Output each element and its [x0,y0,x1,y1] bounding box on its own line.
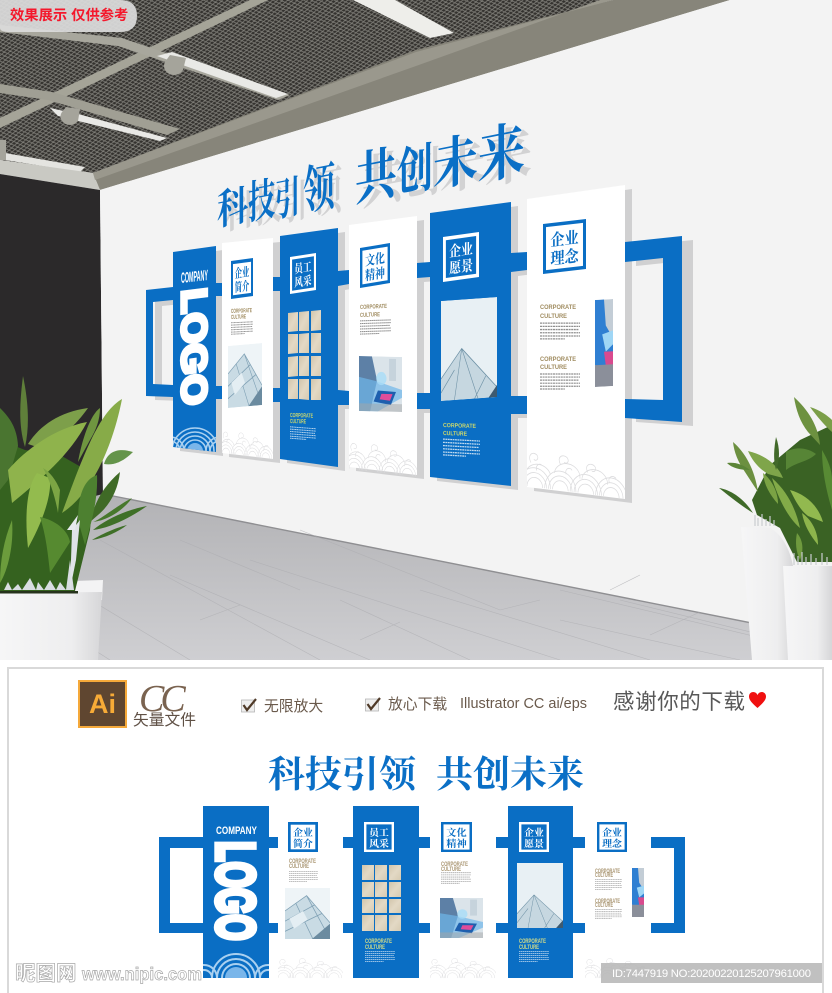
body text lines [231,322,253,334]
flat panel: 员工风采 [353,806,419,978]
label: software version: Illustrator CC ai/eps [460,696,587,712]
company text: COMPANY [181,268,208,287]
label: CC vector file [133,678,196,729]
heading: CULTURE [441,867,461,873]
logo arcs [173,427,216,452]
wave pattern [218,430,274,460]
body text lines [540,323,580,339]
heading: CORPORATE [441,862,468,868]
badge: preview notice: 效果展示 仅供参考 [10,6,128,24]
flat column: 企业理念 [580,822,652,978]
photo: glass building [285,888,330,939]
heading: CORPORATE [595,899,620,905]
wall panel: 企业愿景 [430,202,511,486]
wave pattern [273,959,344,978]
heading: CORPORATE [365,939,392,945]
wave pattern [344,441,418,477]
body text lines [595,880,622,889]
wave pattern [425,959,497,978]
watermark: nipic: www.nipic.com [81,964,202,984]
icon: 企业简介: 企业 [235,264,249,282]
heading [595,899,620,909]
logo text: LOGO [205,841,265,941]
wall title shadow: 技 [255,178,282,234]
icon: 文化精神: 文化 [365,250,385,269]
heading: CULTURE [519,945,539,951]
flat title: 共创未来 [436,754,584,796]
icon: 企业简介: 简介 [293,837,313,850]
wall title: 科技引领 共创未来: 领 [303,158,337,222]
heading: CULTURE [540,314,567,320]
icon: 员工风采: 员工 [369,827,389,839]
icon: 企业愿景: 企业 [449,239,473,260]
heading: CULTURE [289,864,309,870]
photo: main light wall [100,0,832,639]
heading: CORPORATE [519,939,546,945]
heading [360,304,387,319]
wall title shadow: 共 [362,144,405,216]
photo: ceiling with mesh and rails [0,0,613,173]
photo: glass building [228,343,262,408]
flat panel: logo [203,806,269,978]
heading: CULTURE [443,431,467,438]
heading [441,862,468,873]
photo: ceiling edge beam [0,0,730,190]
icon: 文化精神 [360,243,390,288]
icon: 企业理念 [597,822,627,852]
heading: CORPORATE [540,305,576,311]
icon: 企业愿景: 企业 [524,826,544,839]
heading: CULTURE [360,312,380,319]
wall title shadow: 领 [310,162,344,226]
heading: CULTURE [540,365,567,371]
logo text: LOGO [174,286,214,407]
feature: safe download: 放心下载 [388,696,447,713]
icon: 企业简介 [288,822,318,852]
body text lines [595,910,622,918]
body text lines [290,427,316,440]
wall title: 科技引领 共创未来: 未 [433,128,478,198]
icon: Adobe Illustrator [79,681,126,727]
wall title: 科技引领 共创未来: 技 [248,174,275,230]
wall panel: 员工风采 [280,228,338,467]
icon: 企业愿景 [519,822,549,852]
photo grid [288,310,321,400]
icon: 文化精神: 精神 [365,265,385,284]
flat title: 科技引领 [268,754,418,796]
heading: CORPORATE [360,304,387,311]
photo: tablet [440,898,483,938]
logo arcs [203,953,269,978]
body text lines [365,952,395,961]
wave pattern [519,450,627,499]
wall panel: 企业理念 [519,185,627,499]
icon: 企业简介: 企业 [293,826,313,839]
flat layout: brackets and connectors [159,837,685,933]
icon: 员工风采: 风采 [294,273,312,290]
icon: 员工风采 [290,253,316,294]
wall title shadow: 来 [485,119,532,196]
body text lines [443,439,480,457]
wall title shadow [224,119,532,239]
heading [540,305,576,320]
photo: abstract blue [595,299,613,387]
heading [540,357,576,371]
icon: 企业理念: 企业 [602,826,622,839]
flat panel: 企业愿景 [508,806,573,978]
icon: 企业理念: 理念 [550,245,580,269]
icon: 文化精神: 精神 [446,837,467,850]
wall panel: 文化精神 [344,216,418,477]
wall title: 科技引领 共创未来: 引 [275,172,300,226]
watermark: nipic: 昵图网 [15,962,76,985]
wall title: 科技引领 共创未来: 创 [397,139,433,204]
feature: unlimited zoom: 无限放大 [264,698,323,715]
watermark: nipic [15,962,202,985]
wall title: 科技引领 共创未来: 来 [478,115,525,192]
wall panel: 企业简介 [218,238,274,460]
icon: 文化精神: 文化 [446,826,467,839]
label: CC vector file: 矢量文件 [133,711,196,729]
label: CC vector file: CC [139,678,186,720]
culture wall shadows [155,189,693,503]
icon: 企业愿景: 愿景 [524,837,544,850]
icon: 企业简介 [231,258,253,299]
icon: 员工风采 [364,822,394,852]
wall: blue connectors and brackets [146,236,682,422]
icon: Adobe Illustrator: Ai [89,689,116,719]
heading: CORPORATE [595,869,620,875]
heading: CULTURE [290,419,306,425]
body text lines [519,952,549,961]
heading: CORPORATE [290,413,313,420]
wall title shadow: 未 [440,132,485,202]
icon: 文化精神 [441,822,472,852]
heading: CULTURE [365,945,385,951]
feature: safe download [366,696,447,713]
wall title shadow: 科 [224,186,255,239]
wall title shadow: 创 [404,143,440,208]
wall title: 科技引领 共创未来 [217,115,525,235]
lower section background [0,660,832,993]
icon: 员工风采: 员工 [294,259,312,277]
photo: glass building [441,297,497,401]
heading [443,423,476,438]
body text lines [441,873,471,883]
icon: 企业理念: 理念 [602,837,623,850]
icon: heart [749,692,766,708]
wall panel: company logo [173,246,216,452]
heading [290,413,313,425]
icon: 企业理念: 企业 [550,227,579,250]
body text lines [360,320,391,334]
body text lines [289,872,318,881]
icon: 企业理念 [543,219,586,274]
wall title: 科技引领 共创未来: 科 [217,182,248,235]
heading: CULTURE [595,873,613,879]
heading [595,869,620,879]
heading: CULTURE [595,903,613,909]
image id strip: ID:7447919 NO:20200220125207961000 [612,968,811,980]
wall title shadow: 引 [282,176,307,230]
icon: 企业简介: 简介 [235,278,250,296]
flat column: 企业简介 [273,822,344,978]
plant: left [0,376,147,660]
icon: 员工风采: 风采 [369,837,389,850]
heading: CORPORATE [540,357,576,363]
icon: 企业愿景 [443,232,479,282]
photo: grey wood floor [0,494,832,660]
heading [289,859,316,870]
heading: CORPORATE [443,423,476,430]
photo: dark side wall [0,174,103,520]
heading [365,939,392,951]
plant: right [719,397,832,660]
heading: CORPORATE [231,308,252,315]
wall title: 科技引领 共创未来: 共 [355,140,398,212]
icon: 企业愿景: 愿景 [449,256,473,277]
photo: tablet [359,356,402,412]
heading: CORPORATE [289,859,316,865]
photo: glass building [517,863,563,928]
flat title [268,754,584,796]
thanks message: 感谢你的下载 [613,690,745,714]
photo: abstract blue [632,868,644,917]
heading [519,939,546,951]
badge: preview notice [0,0,137,32]
heading: CULTURE [231,314,246,321]
company text: COMPANY [216,825,257,837]
heading [231,308,252,321]
image id strip [601,963,822,983]
wave pattern [580,959,652,978]
body text lines [540,374,580,389]
flat column: 文化精神 [425,822,497,978]
feature: unlimited zoom [242,698,323,715]
photo grid [362,865,401,931]
